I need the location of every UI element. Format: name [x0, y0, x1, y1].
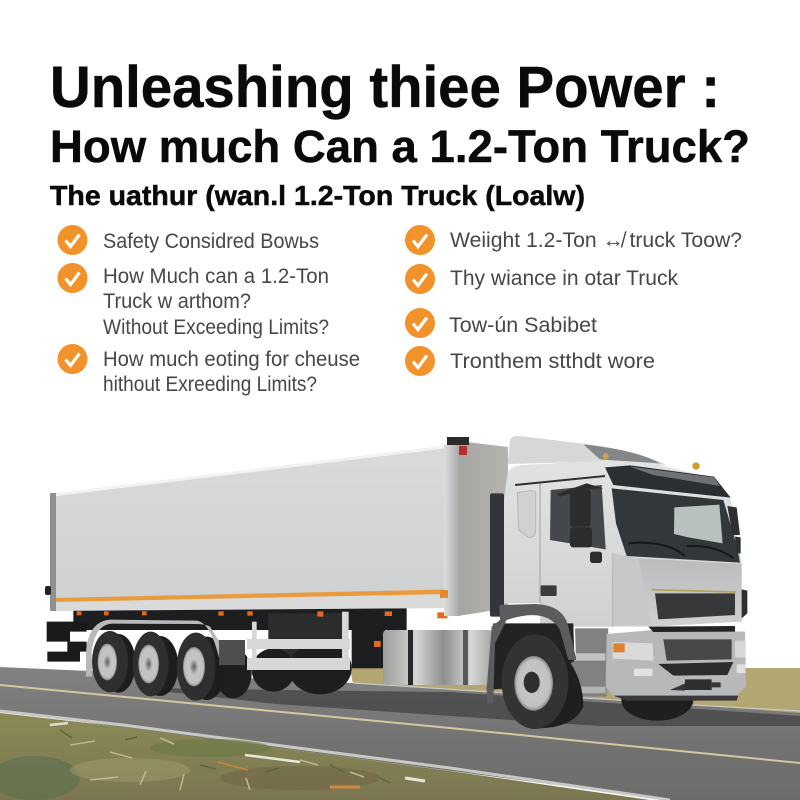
item: wiance: Thy wiance in otar Truck	[450, 267, 678, 290]
box top rail	[52, 447, 445, 495]
cargo box	[45, 447, 446, 611]
scene: road and verge	[0, 667, 800, 800]
icon: orange check 5	[405, 264, 435, 294]
item: safety: Safety Considred Bowьs	[103, 230, 319, 253]
wheel 2	[133, 632, 178, 696]
roof fairing	[508, 436, 667, 465]
grille	[655, 593, 735, 619]
chassis	[73, 607, 407, 630]
icon: orange check 3	[58, 344, 88, 374]
item: weight: Weiight 1.2-Ton ↮ truck Toow?	[450, 229, 742, 252]
subtitle: The uathur (wan.l 1.2-Ton Truck (Loalw)	[50, 180, 585, 211]
item: how much: Truck w arthom?	[103, 290, 251, 313]
top rail	[515, 476, 605, 485]
rear lamp	[45, 586, 51, 595]
roof lights	[692, 462, 700, 470]
rear strip	[490, 493, 504, 617]
road shadow	[150, 688, 800, 726]
wheel 1	[92, 631, 136, 693]
near edge line	[0, 711, 670, 800]
road surface	[0, 667, 800, 800]
box front section	[440, 437, 508, 616]
item: tow: Tow-ún Sabibet	[449, 314, 597, 337]
title: Unleashing thiee Power :	[50, 55, 720, 120]
rear bumper	[47, 622, 87, 662]
cab	[487, 436, 747, 729]
storage box	[268, 613, 343, 660]
orange stripe	[54, 590, 446, 602]
rear chassis and wheels	[47, 607, 447, 701]
right mirror	[727, 506, 741, 553]
door line	[540, 483, 613, 627]
checklist: left column	[58, 225, 360, 396]
windshield	[612, 488, 740, 563]
bumper grille	[663, 639, 732, 661]
wheel 3	[177, 633, 226, 701]
item: how much	[103, 265, 329, 339]
title	[50, 55, 750, 172]
icon: orange check 4	[405, 225, 435, 255]
icon: orange check 2	[58, 263, 88, 293]
marker lights	[77, 611, 447, 647]
vent window	[517, 491, 536, 537]
rear post	[50, 493, 56, 611]
wipers	[628, 543, 733, 558]
door handle	[541, 585, 557, 596]
road line	[0, 685, 800, 763]
fuel tanks	[383, 630, 493, 685]
far verge	[350, 668, 800, 714]
inner dark wheels	[215, 642, 352, 698]
number plate	[685, 679, 712, 690]
sun visor	[605, 465, 731, 498]
far front wheel	[621, 679, 693, 721]
bumper	[606, 630, 746, 696]
mirror	[557, 483, 603, 563]
side window	[550, 485, 606, 549]
side guard	[247, 612, 350, 670]
icon: orange check 6	[405, 308, 435, 338]
wheel arch interior	[487, 623, 575, 690]
item: how much: Without Exceeding Limits?	[103, 316, 329, 339]
gold trim	[652, 590, 736, 592]
checklist: right column	[405, 225, 742, 376]
front panel	[638, 558, 742, 626]
item: eoting: How much eoting for cheuse	[103, 348, 360, 371]
fender	[487, 604, 577, 703]
item: how much: How Much can a 1.2-Ton	[103, 265, 329, 288]
item: tronthem: Tronthem stthdt wore	[450, 350, 655, 373]
item: eoting: hithout Exreeding Limits?	[103, 373, 317, 396]
front wheel	[502, 634, 583, 729]
foreground grass	[0, 713, 650, 800]
item: eoting	[103, 348, 360, 396]
headlight	[613, 642, 653, 661]
icon: orange check 7	[405, 346, 435, 376]
truck	[45, 436, 747, 729]
icon: orange check 1	[58, 225, 88, 255]
box bottom band	[52, 590, 446, 611]
step panel	[570, 628, 608, 697]
cab shell	[499, 461, 742, 627]
title: How much Can a 1.2-Ton Truck?	[50, 121, 750, 172]
mudguard	[86, 620, 245, 677]
far edge line	[353, 683, 800, 711]
